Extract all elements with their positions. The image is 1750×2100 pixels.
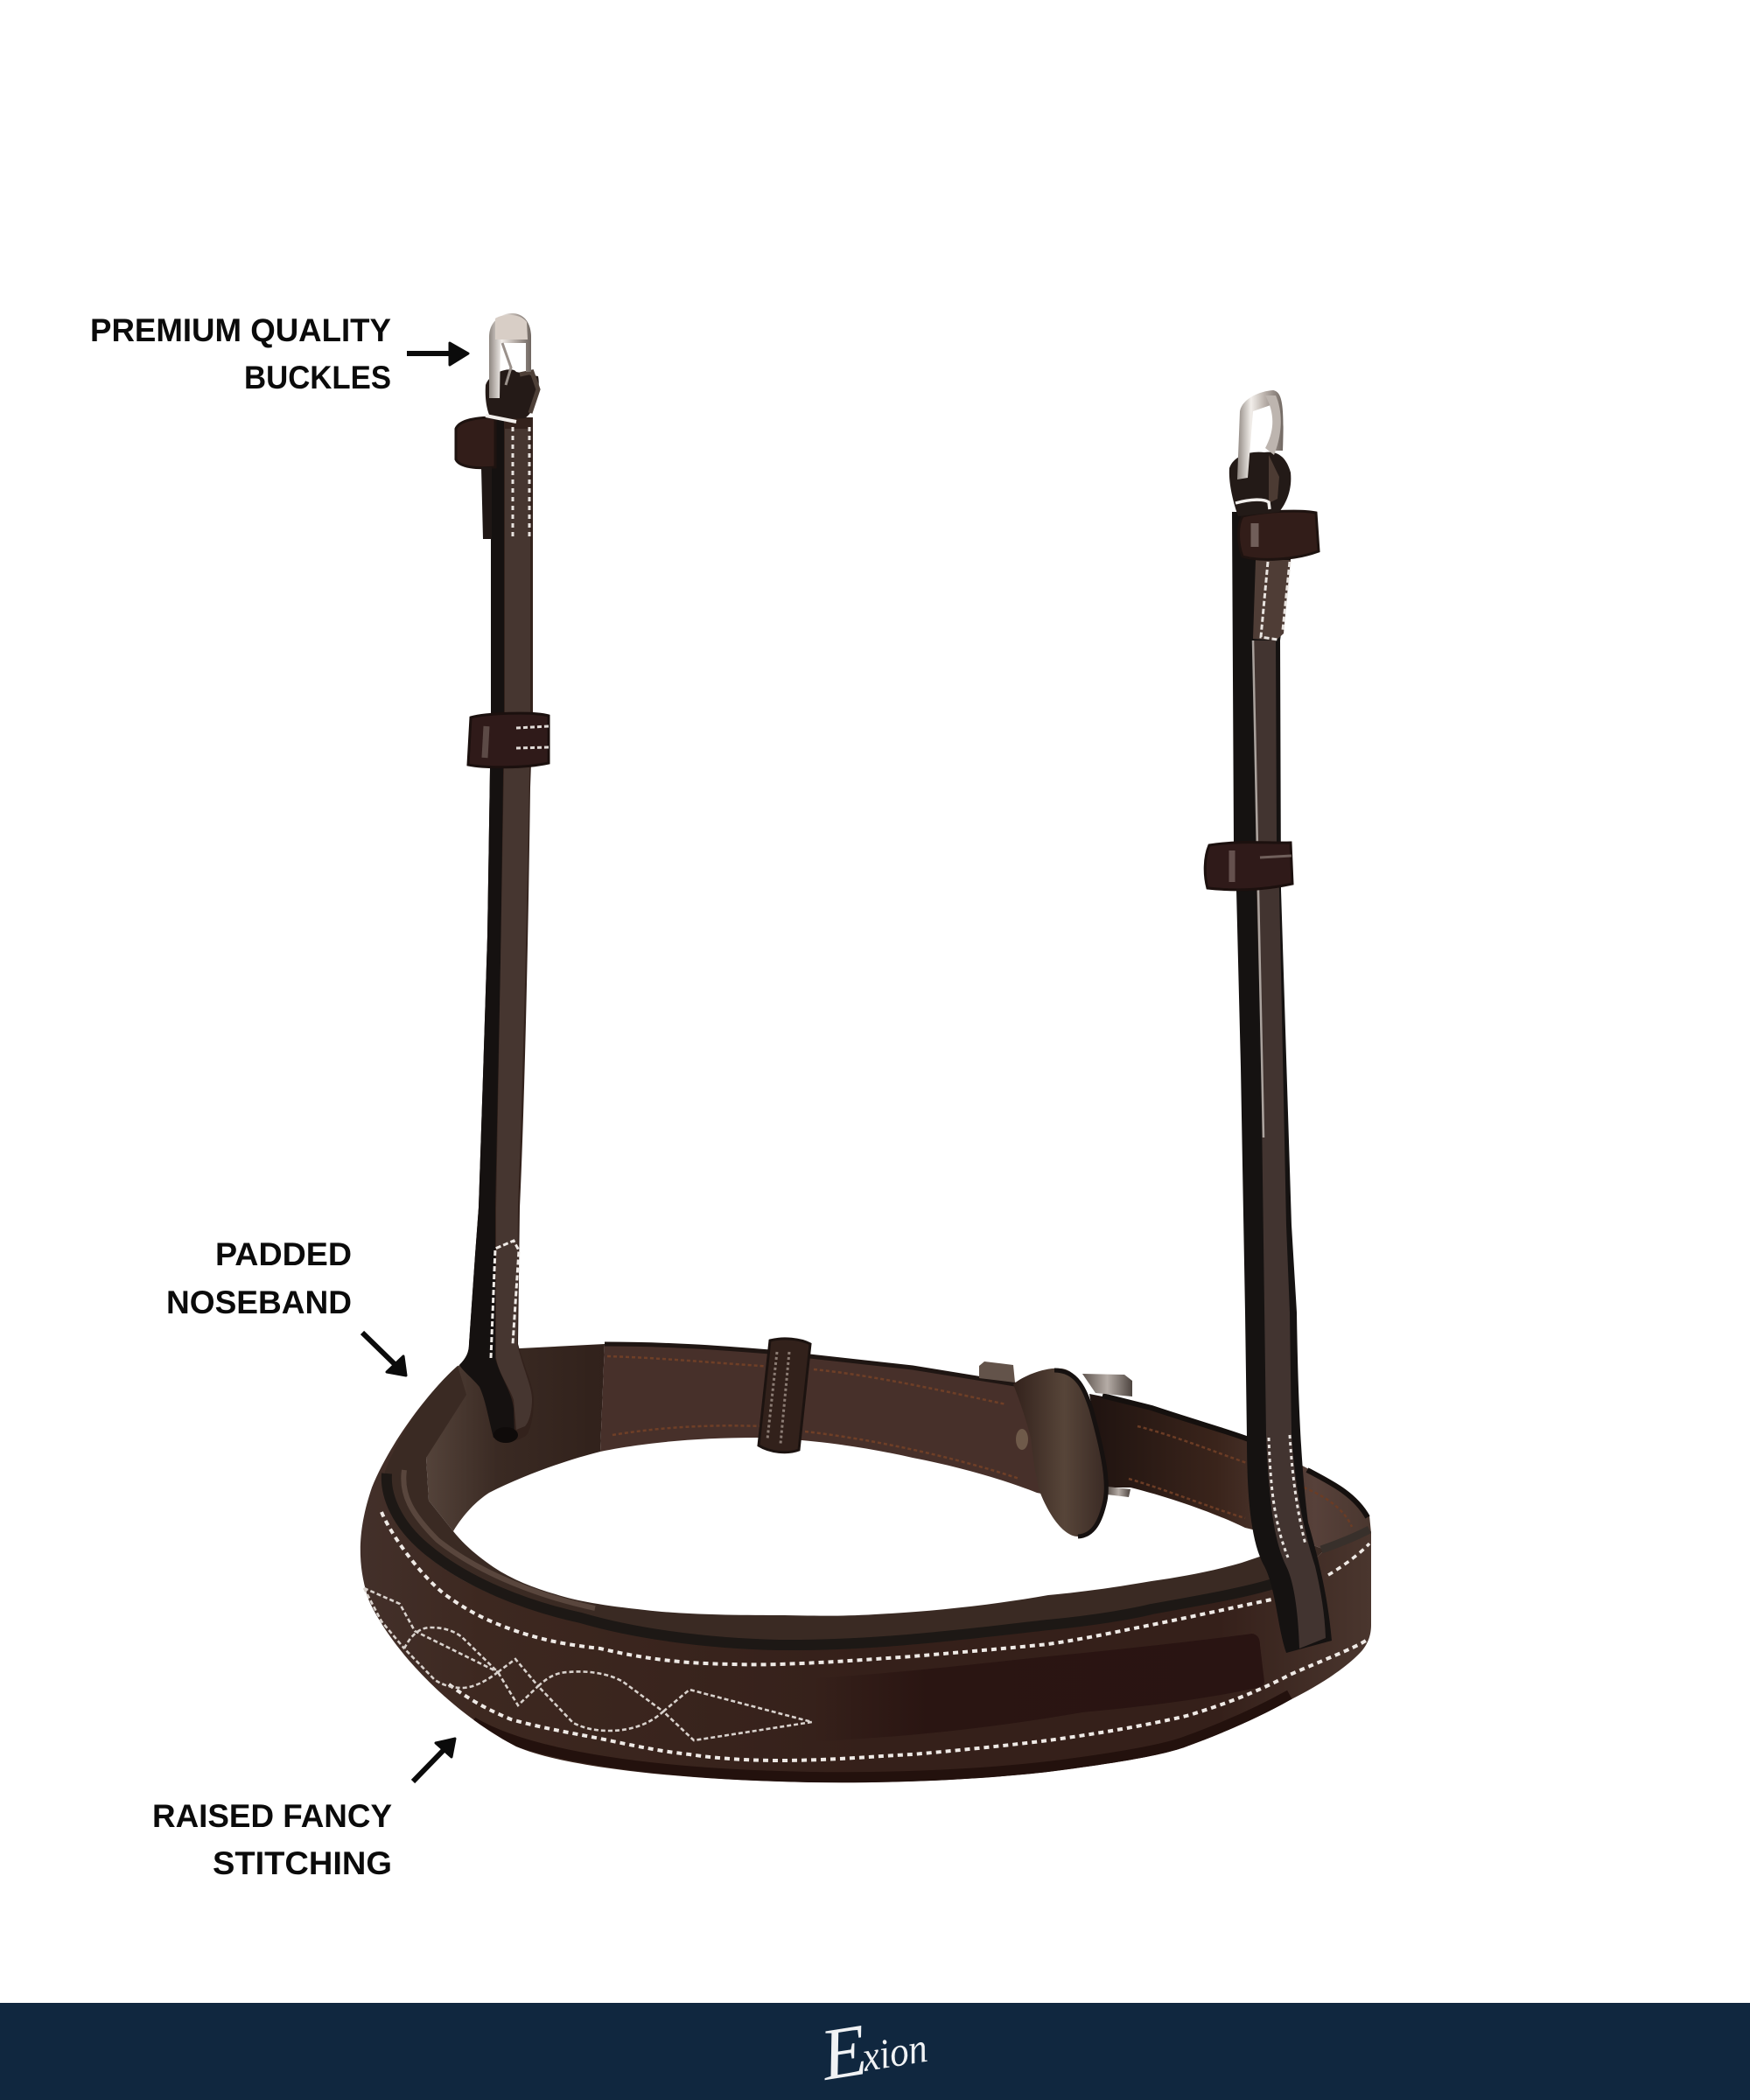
right end stitching: [1328, 1544, 1369, 1575]
label: padded noseband: PADDED: [215, 1236, 352, 1272]
arrow: to stitching: [413, 1739, 455, 1782]
back strap: right section: [1089, 1394, 1371, 1550]
back strap: left padded lining: [426, 1344, 605, 1531]
strap end hollow: [494, 1427, 518, 1443]
top stitching: [382, 1512, 1276, 1664]
top keeper: [1239, 511, 1319, 559]
back strap keeper: [759, 1339, 810, 1452]
buckle loop: [486, 369, 539, 420]
keeper highlight: [1251, 523, 1258, 547]
left strap: [456, 313, 549, 1443]
stitched tab: [1253, 560, 1291, 640]
padded roll: [384, 1366, 1325, 1648]
left strap leather: [459, 417, 534, 1441]
label: padded noseband: NOSEBAND: [166, 1284, 352, 1320]
lower keeper: [1205, 843, 1292, 890]
top keeper: [456, 417, 495, 468]
buckle: [489, 313, 531, 398]
label: raised fancy stitching: [152, 1798, 392, 1881]
flap rim: [1054, 1370, 1106, 1536]
black piping line: [387, 1474, 1273, 1645]
footer logo: E: [815, 2009, 872, 2096]
bottom stitching: [449, 1641, 1366, 1760]
fancy stitching pattern: [364, 1588, 812, 1740]
arrow: to buckle: [407, 343, 468, 365]
band bottom edge shadow: [472, 1695, 1290, 1777]
footer logo: [815, 1999, 932, 2096]
buckle loop: [1229, 452, 1291, 516]
footer logo: xion: [858, 2025, 930, 2081]
footer bar: [0, 1999, 1750, 2100]
label: premium quality buckles: BUCKLES: [244, 360, 391, 396]
buckle: [1237, 390, 1284, 480]
strap hole: [1016, 1429, 1028, 1450]
left strap face: [496, 429, 532, 1430]
label: raised fancy stitching: RAISED FANCY: [152, 1798, 392, 1834]
middle keeper: [468, 713, 549, 767]
buckle behind flap: [979, 1362, 1132, 1497]
front band: [360, 1366, 1371, 1782]
label: premium quality buckles: PREMIUM QUALITY: [90, 312, 391, 348]
back strap: centre: [600, 1344, 1054, 1496]
label: raised fancy stitching: STITCHING: [213, 1845, 392, 1881]
roll highlight: [403, 1470, 595, 1608]
right strap dark: [1232, 512, 1332, 1653]
left strap dark edge: [459, 417, 514, 1438]
raised panel: [814, 1634, 1264, 1741]
label: premium quality buckles: [90, 312, 391, 396]
right strap stitching: [1269, 1435, 1306, 1558]
buckle tab flap: [1013, 1368, 1106, 1536]
wire tie: [1236, 500, 1270, 509]
wire tie: [486, 416, 516, 422]
right strap: [1205, 390, 1332, 1653]
right end rim: [1321, 1530, 1369, 1550]
noseband product: [360, 313, 1371, 1782]
left strap stitching: [513, 427, 529, 539]
label: padded noseband: [166, 1236, 352, 1320]
arrow: to noseband: [362, 1333, 406, 1376]
keeper flap: [481, 467, 492, 539]
lower stitched panel: [491, 1241, 519, 1358]
right strap face: [1253, 640, 1326, 1648]
